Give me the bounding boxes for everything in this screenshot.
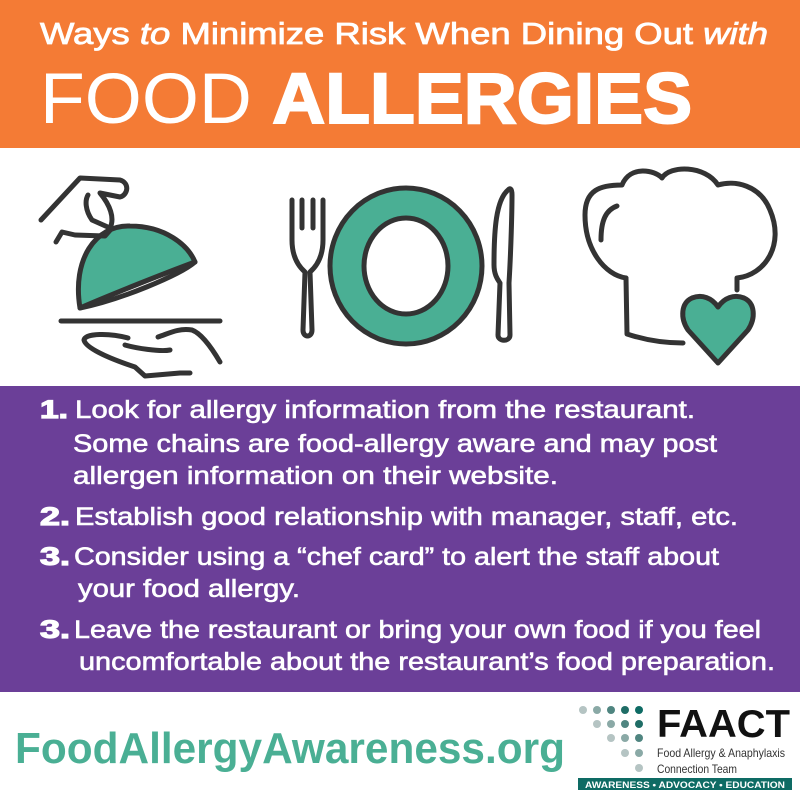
panel: tips list — [0, 386, 800, 692]
footer website: FoodAllergyAwareness.org — [15, 724, 565, 773]
tip 1: Look for allergy information from the restaurant. — [75, 396, 695, 424]
tip 1: 1. — [40, 396, 68, 424]
title: FOOD ALLERGIES — [40, 60, 692, 139]
icon: cloche with hands — [41, 178, 220, 376]
logo: FAACT: Food Allergy & Anaphylaxis — [657, 746, 785, 760]
tip 3: Consider using a “chef card” to alert the staff about — [74, 543, 719, 571]
tip 4: 3. — [40, 616, 70, 644]
logo: FAACT: FAACT — [657, 703, 790, 746]
tip 4: Leave the restaurant or bring your own food if you feel — [74, 616, 761, 644]
header banner — [0, 0, 800, 148]
tip 2: 2. — [40, 503, 70, 531]
tip 3: your food allergy. — [78, 575, 300, 603]
tip 1: Some chains are food-allergy aware and may post — [73, 430, 717, 458]
icon: fork, plate and knife — [292, 188, 512, 344]
tip 1 — [40, 396, 717, 490]
plate — [330, 188, 482, 344]
logo: FAACT: AWARENESS • ADVOCACY • EDUCATION — [585, 780, 785, 790]
logo: FAACT: Connection Team — [657, 762, 737, 776]
tip 4: uncomfortable about the restaurant’s food preparation. — [79, 648, 775, 676]
subtitle: Ways to Minimize Risk When Dining Out with — [40, 16, 768, 51]
fork — [292, 200, 323, 336]
tip 1: allergen information on their website. — [73, 462, 558, 490]
logo: FAACT — [578, 703, 792, 790]
tip 4 — [40, 616, 775, 676]
knife — [494, 189, 512, 340]
tip 3: 3. — [40, 543, 70, 571]
tip 2: Establish good relationship with manager, staff, etc. — [75, 503, 738, 531]
heart — [683, 296, 753, 363]
tip 3 — [40, 543, 719, 603]
icon: chef hat with heart — [585, 169, 775, 363]
logo dots — [579, 706, 643, 772]
